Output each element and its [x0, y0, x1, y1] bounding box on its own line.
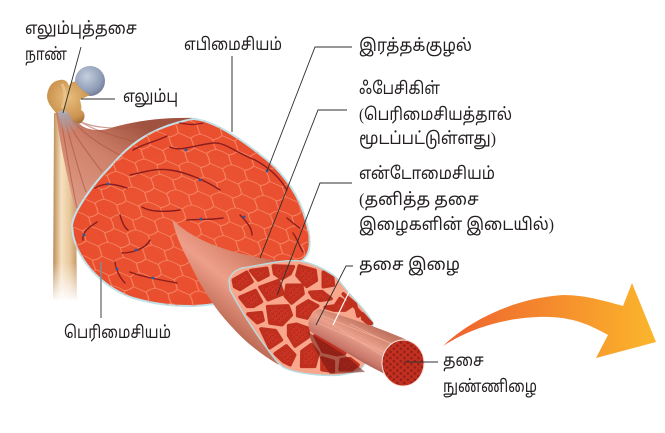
label: myofibril: நுண்ணிழை: [443, 377, 537, 398]
label: endomysium: என்டோமைசியம்: [359, 164, 495, 183]
label: endomysium: [359, 164, 554, 236]
arrow: orange curved: [443, 283, 656, 358]
panel: fascicle bundle: [172, 219, 373, 375]
label: fascicle: (பெரிமைசியத்தால்: [359, 105, 512, 125]
leader lines: [63, 47, 438, 362]
icon: bone shaft: [50, 113, 82, 302]
label: fascicle: ஃபேசிகிள்: [359, 79, 440, 98]
icon: bone head with joint ball: [47, 66, 105, 123]
fibre end with myofibrils: [382, 340, 424, 386]
label: myofibril: தசை: [443, 351, 484, 371]
label: fascicle: [359, 79, 512, 150]
panel: muscle body cross-section: [71, 118, 311, 307]
label: tendon line 2: நாண்: [25, 45, 67, 66]
panel: single muscle fibre cylinder: [308, 309, 424, 386]
label: endomysium: இழைகளின் இடையில்): [359, 215, 554, 236]
blood vessels in muscle: [83, 123, 303, 283]
label: muscle fibre: தசை இழை: [359, 255, 460, 276]
label: epimysium: எபிமைசியம்: [184, 35, 282, 54]
label: blood vessel: இரத்தக்குழல்: [359, 36, 472, 57]
label: myofibril: [443, 351, 537, 398]
fascicle cut face with muscle fibres: [229, 261, 373, 375]
fibre shadow: [308, 332, 365, 374]
label: endomysium: (தனித்த தசை: [359, 190, 479, 210]
label: perimysium: பெரிமைசியம்: [64, 323, 171, 342]
label: bone: எலும்பு: [123, 87, 178, 108]
label: tendon: எலும்புத்தசை: [25, 19, 137, 40]
icon: tendon fanning into muscle: [56, 106, 196, 212]
label: fascicle: மூடப்பட்டுள்ளது): [359, 129, 496, 150]
